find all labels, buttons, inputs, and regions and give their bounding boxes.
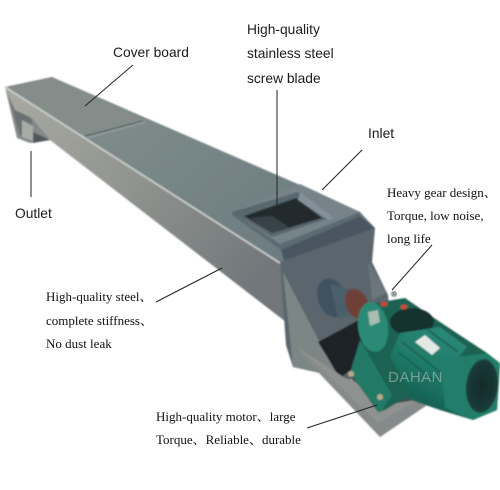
callout: motor: High-quality motor、large	[156, 409, 296, 424]
motor body with fins	[390, 327, 467, 410]
inlet hopper	[232, 184, 375, 264]
base plate	[297, 347, 445, 437]
end plate	[280, 228, 392, 385]
screw conveyor machine	[5, 77, 500, 437]
callout: steel: High-quality steel、	[46, 289, 153, 304]
pedestal	[350, 340, 392, 413]
callout: screw blade: stainless steel	[247, 46, 334, 61]
callout: steel	[46, 268, 222, 351]
callout: cover board	[85, 45, 189, 106]
callout: gear design: Heavy gear design、	[387, 185, 497, 200]
callout: gear design	[387, 185, 497, 290]
outlet end	[5, 87, 60, 146]
callout: steel: complete stiffness、	[46, 313, 153, 328]
motor	[348, 291, 500, 420]
reducer rings	[390, 308, 434, 336]
callout: outlet: Outlet	[15, 206, 52, 221]
coupling	[312, 274, 374, 323]
watermark: DAHAN	[388, 369, 443, 386]
callout: steel: No dust leak	[46, 336, 112, 351]
motor silhouette	[350, 298, 500, 420]
callout: outlet	[15, 151, 52, 221]
callout: gear design: long life	[387, 231, 431, 246]
callout: motor	[156, 405, 377, 447]
cover board top	[5, 77, 375, 263]
callout: gear design: Torque, low noise,	[387, 208, 484, 223]
callout: screw blade: screw blade	[247, 71, 321, 86]
callout: inlet: Inlet	[368, 126, 394, 141]
callout: screw blade	[247, 22, 334, 206]
callout: inlet	[322, 126, 394, 190]
callout: motor: Torque、Reliable、durable	[156, 432, 301, 447]
callout: screw blade: High-quality	[247, 22, 320, 37]
callout: cover board: Cover board	[113, 45, 189, 60]
trough side face	[5, 88, 286, 322]
fan cap	[442, 353, 500, 420]
